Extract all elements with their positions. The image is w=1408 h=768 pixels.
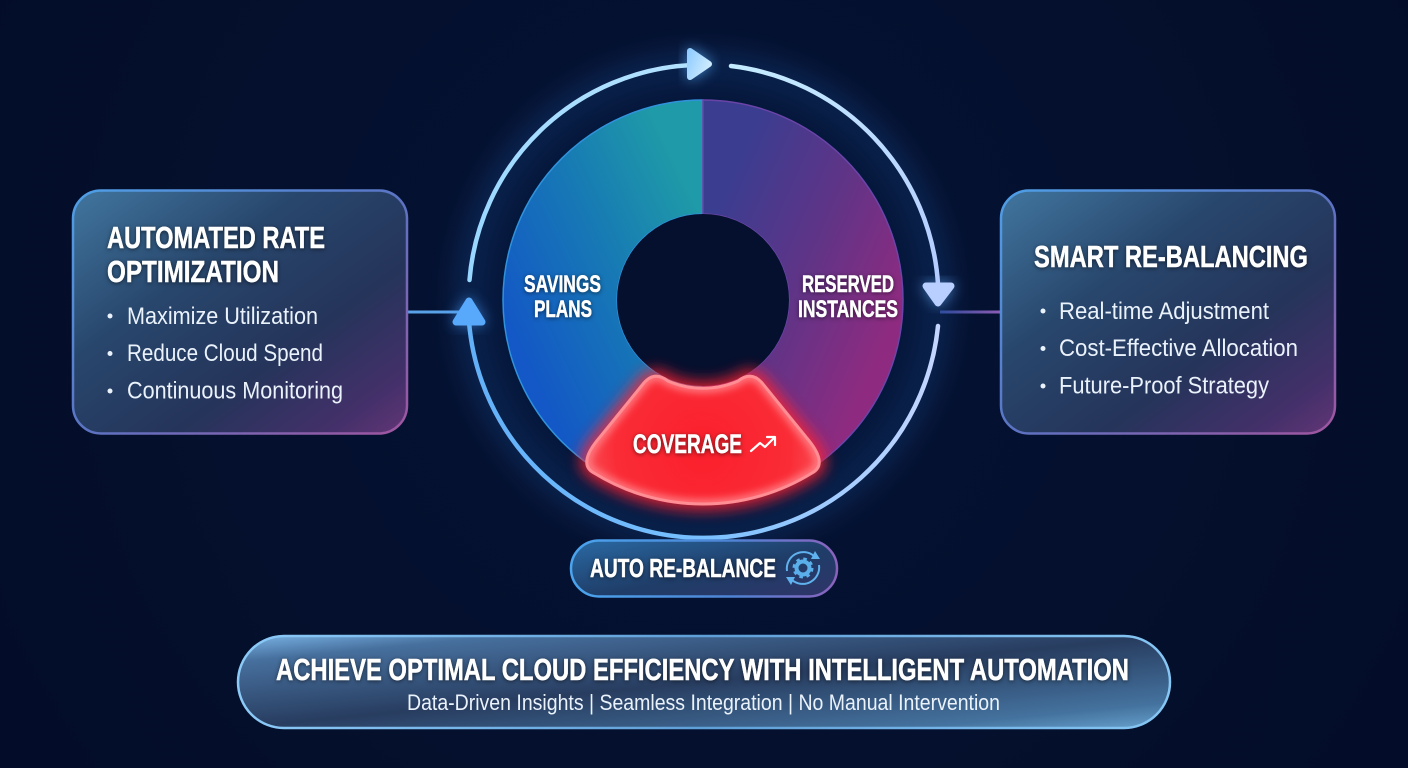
segment: savings plans [503, 100, 703, 500]
bullet list: Real-time Adjustment [1059, 298, 1269, 325]
pill: auto re-balance: AUTO RE-BALANCE [590, 553, 776, 583]
heading: OPTIMIZATION [107, 254, 279, 289]
icon: gear with refresh arrows [786, 551, 820, 585]
connector: ring to right panel [940, 310, 1000, 314]
bullet list: Future-Proof Strategy [1059, 372, 1269, 400]
icon: upward trend [751, 437, 775, 451]
bullet list: Cost-Effective Allocation [1059, 335, 1298, 362]
cycle ring arrows [456, 51, 951, 538]
bullet list [108, 303, 343, 404]
bullet list: Reduce Cloud Spend [127, 340, 323, 367]
donut chart [503, 100, 903, 504]
arrow: bottom arc [456, 301, 938, 538]
arrow: top-right arc [731, 66, 951, 303]
bullet list [1040, 298, 1298, 400]
panel: automated rate optimization [73, 190, 407, 434]
segment: coverage [587, 376, 819, 504]
panel: smart re-balancing [1001, 190, 1335, 434]
donut hole [617, 214, 789, 386]
ring glow [468, 65, 938, 535]
banner heading: ACHIEVE OPTIMAL CLOUD EFFICIENCY WITH INTELLIGENT AUTOMATION [276, 652, 1129, 687]
segment: reserved instances: INSTANCES [798, 296, 898, 323]
coverage glow [587, 376, 819, 504]
segment: coverage: COVERAGE [633, 429, 742, 459]
banner: call to action [238, 636, 1170, 728]
heading: SMART RE-BALANCING [1034, 239, 1308, 274]
heading [107, 220, 325, 289]
connector: left panel to ring [408, 310, 460, 314]
segment: reserved instances: RESERVED [802, 271, 894, 298]
segment: savings plans: SAVINGS [524, 271, 601, 298]
pill: auto re-balance [571, 540, 837, 596]
segment: reserved instances [703, 100, 903, 500]
bullet list: Maximize Utilization [127, 303, 318, 330]
segment: savings plans: PLANS [534, 296, 592, 323]
arrow: top-left arc [470, 51, 709, 280]
banner subtitle: Data-Driven Insights | Seamless Integration | No Manual Intervention [407, 690, 1000, 715]
heading: AUTOMATED RATE [107, 220, 325, 255]
bullet list: Continuous Monitoring [127, 378, 343, 404]
